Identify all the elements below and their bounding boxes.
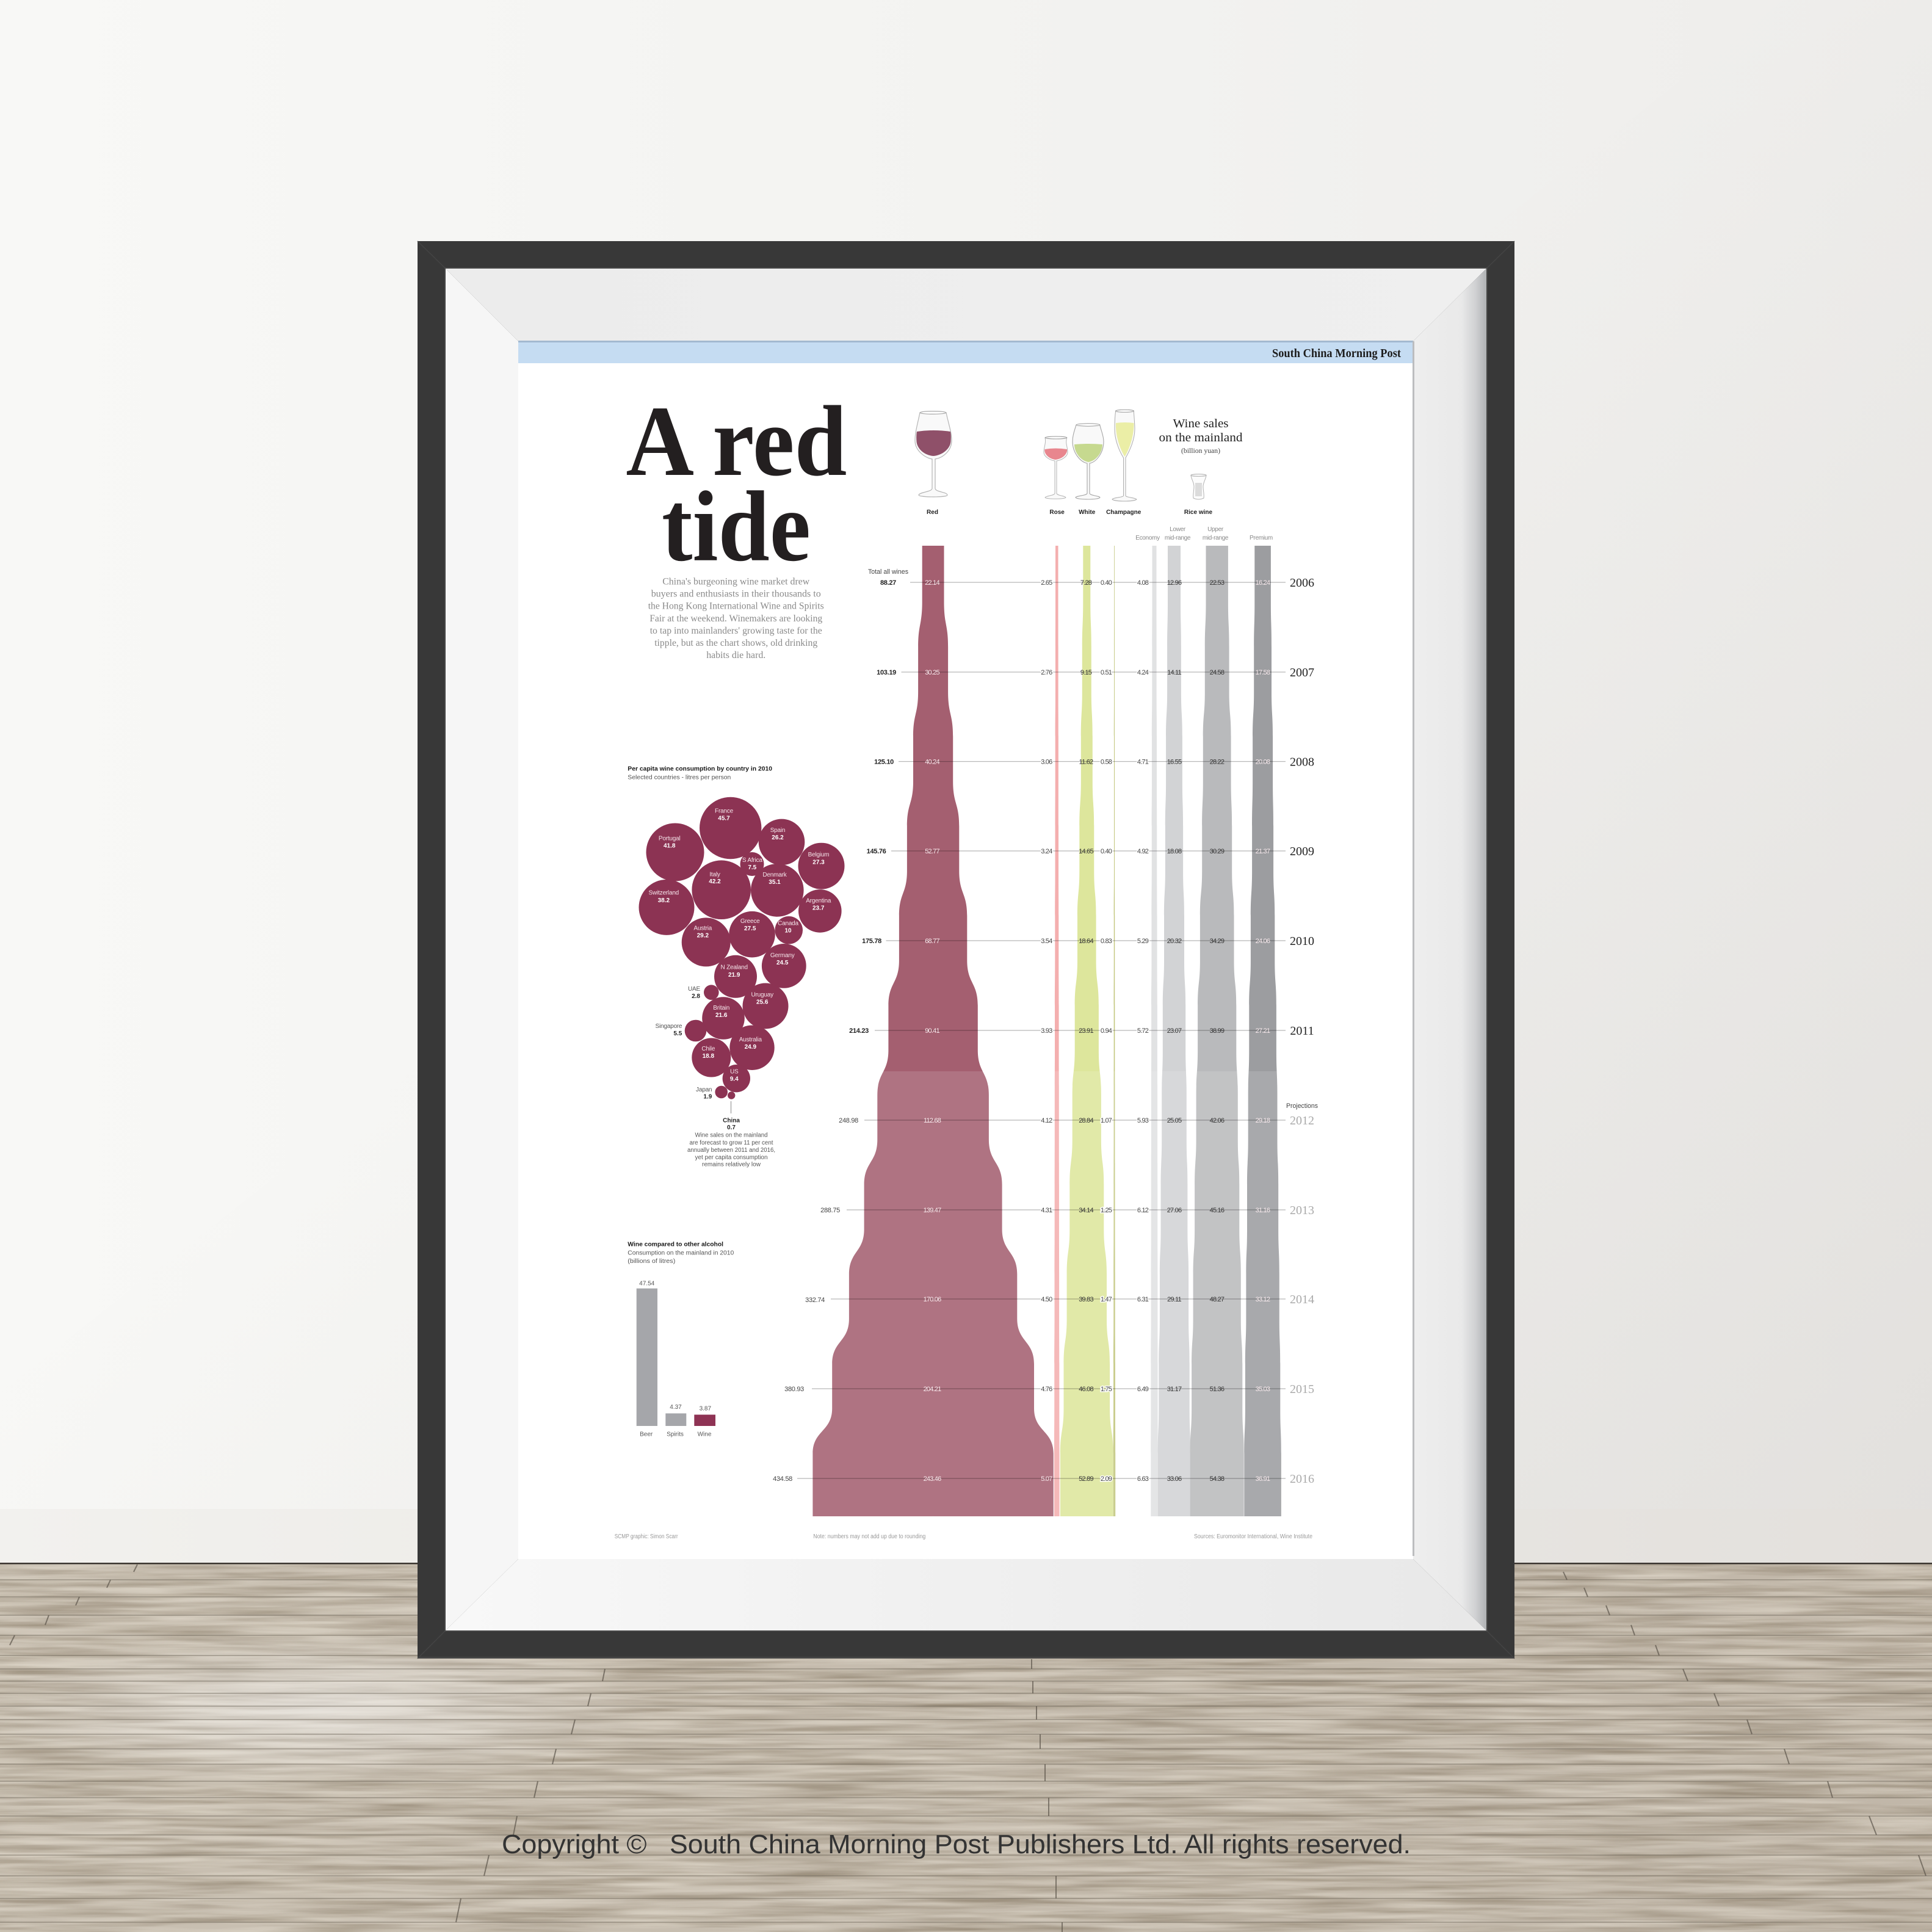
bubble: Denmark: 35.1 [769,879,781,886]
row 2015: 2015 [1290,1383,1314,1396]
heading: alcohol comparison: (billions of litres) [628,1258,675,1265]
row 2012: 28.84 [1079,1117,1093,1124]
row 2016: 243.46 [924,1475,941,1483]
title: A red [626,385,847,497]
intro text: the Hong Kong International Wine and Spirits [648,601,824,612]
chart heading: wine sales on the mainland [1159,417,1243,455]
row 2011: 5.72 [1137,1027,1149,1035]
bubble: Uruguay: 25.6 [756,999,769,1006]
bubble: Argentina: 23.7 [812,905,825,912]
bubble: Australia: 24.9 [745,1044,756,1051]
column: premium [1244,546,1281,1516]
icon: rice wine cup [1191,474,1206,499]
row 2006: 2006 [1290,576,1314,590]
bubble: Argentina: Argentina [806,898,831,905]
row 2006: 7.28 [1080,579,1092,587]
bubble: Spain: 26.2 [772,834,784,841]
row 2012: 42.06 [1210,1117,1225,1124]
bubble: France: France [715,808,734,814]
row 2011: 90.41 [925,1027,939,1035]
bubble: UAE [688,985,719,1000]
bubble: Singapore: Singapore [656,1023,682,1030]
bubble: Switzerland [639,880,695,935]
row 2010: 5.29 [1137,938,1149,945]
icon: white wine glass [1073,424,1104,499]
bubble: Austria: Austria [693,925,712,932]
row 2013: 1.25 [1101,1207,1112,1214]
bubble: Belgium: Belgium [808,852,829,858]
row 2009: 21.37 [1256,848,1270,855]
row 2011: 214.23 [849,1027,869,1035]
row 2015: 204.21 [924,1386,941,1393]
row 2015: 31.17 [1167,1386,1182,1393]
row 2010: 175.78 [862,938,881,945]
bubble: Germany: Germany [770,952,795,959]
row 2010: 0.83 [1101,938,1112,945]
row 2014: 1.47 [1101,1296,1112,1303]
bubble: Uruguay [742,983,789,1029]
poster sheet [518,341,1413,1559]
bubble: Greece [729,911,775,957]
bubble: Canada: 10 [784,927,792,934]
row 2009: 18.08 [1167,848,1182,855]
row 2007: 103.19 [877,669,896,676]
bar: beer: 47.54 [639,1281,655,1287]
row 2015: 6.49 [1137,1386,1149,1393]
price segment column labels: mid-range [1203,535,1229,541]
row 2009: 2009 [1290,845,1314,858]
row 2008: 28.22 [1210,758,1225,765]
intro text: habits die hard. [706,650,765,660]
callout: China note: are forecast to grow 11 per cent [690,1140,773,1146]
bar: wine: Wine [698,1431,712,1438]
panel: wine compared to other alcohol [628,1241,734,1438]
bar: wine: 3.87 [700,1405,711,1412]
row 2016: 5.07 [1041,1475,1052,1483]
bubble: Denmark: Denmark [762,872,787,878]
row 2010: 2010 [1290,935,1314,948]
bubble: Australia: Australia [739,1037,762,1043]
row 2011: 27.21 [1256,1027,1270,1035]
row 2013: 31.16 [1256,1207,1270,1214]
row 2008: 2008 [1290,756,1314,769]
masthead band: South China Morning Post [1272,347,1401,360]
row 2011: 0.94 [1101,1027,1112,1035]
row 2007: 9.15 [1080,669,1092,676]
bubble chart: grape cluster [639,797,845,1131]
glass labels [927,509,1212,516]
bubble: Switzerland: Switzerland [649,889,679,896]
price segment column labels: Premium [1250,535,1273,541]
heading: per capita: Selected countries - litres per person [628,774,731,781]
bubble: Britain: Britain [713,1005,729,1011]
row 2011 [849,1024,1314,1038]
callout: China note: annually between 2011 and 2016, [687,1147,775,1154]
bubble: Canada: Canada [778,921,799,927]
bubble: N Zealand: N Zealand [721,964,748,971]
bubble: Italy [692,860,751,919]
row 2006: 0.40 [1101,579,1112,587]
row 2012: 4.12 [1041,1117,1052,1124]
sources: Sources: Euromonitor International, Wine Institute [1194,1533,1312,1540]
row 2009: 14.65 [1079,848,1093,855]
bubble: Argentina [798,889,842,933]
row 2009 [867,845,1314,858]
row 2011: 23.07 [1167,1027,1182,1035]
row 2014: 29.11 [1167,1296,1182,1303]
bubble: Portugal: 41.8 [664,842,676,850]
chart heading: wine sales on the mainland: Wine sales [1173,417,1229,430]
intro text: Fair at the weekend. Winemakers are looking [649,613,822,624]
heading: alcohol comparison: Consumption on the mainland in 2010 [628,1250,734,1256]
row 2013: 4.31 [1041,1207,1052,1214]
chart heading: wine sales on the mainland: (billion yuan) [1181,447,1220,455]
intro text: buyers and enthusiasts in their thousands to [651,588,821,599]
bubble: Belgium [798,843,845,889]
bubble: Singapore: 5.5 [673,1030,682,1037]
callout: China note [687,1132,775,1168]
row 2006: 4.08 [1137,579,1149,587]
row 2015: 46.08 [1079,1386,1093,1393]
intro text: tipple, but as the chart shows, old drinking [654,638,817,648]
heading: alcohol comparison: Wine compared to other alcohol [628,1241,723,1248]
bar: beer: Beer [640,1431,653,1438]
icon: champagne flute [1112,410,1137,501]
bubble: Japan: Japan [696,1087,712,1093]
wooden floor [0,1563,1932,1932]
note: Note: numbers may not add up due to rounding [813,1533,925,1540]
row 2016: 52.89 [1079,1475,1093,1483]
row 2013: 288.75 [820,1207,840,1214]
bubble: Chile: 18.8 [703,1053,714,1060]
bubble: Canada [775,916,803,944]
chart: wine sales stream columns [806,546,1288,1516]
bubble: Austria [682,917,731,966]
price segment column labels: Lower [1170,526,1186,533]
glass labels: Rice wine [1184,509,1212,516]
total all wines heading: Total all wines [868,568,908,576]
column: champagne [1113,546,1115,1516]
row 2010: 24.06 [1256,938,1270,945]
column: economy [1151,546,1158,1516]
row 2012: 248.98 [839,1117,858,1124]
bubble: Greece: 27.5 [744,925,756,932]
bubble: China [723,1091,740,1131]
row 2016: 54.38 [1210,1475,1225,1483]
heading: per capita [628,765,772,781]
credit: SCMP graphic: Simon Scarr [615,1533,678,1540]
row 2006: 12.96 [1167,579,1182,587]
bubble: Portugal: Portugal [659,835,681,842]
heading: per capita: Per capita wine consumption by country in 2010 [628,765,772,773]
row 2011: 3.93 [1041,1027,1052,1035]
row 2009: 145.76 [867,848,886,855]
row 2008: 40.24 [925,758,939,765]
row 2007: 4.24 [1137,669,1149,676]
bubble: Britain: 21.6 [715,1012,728,1019]
panel: per capita consumption [628,765,845,1168]
row 2008 [874,756,1314,769]
row 2012: 1.07 [1101,1117,1112,1124]
bubble: Switzerland: 38.2 [658,897,670,904]
row 2015: 1.75 [1101,1386,1112,1393]
row 2007: 24.58 [1210,669,1225,676]
row 2012: 2012 [1290,1114,1314,1127]
copyright line: Copyright © South China Morning Post Publishers Ltd. All rights reserved. [502,1829,1411,1859]
icon: rose wine glass [1044,436,1068,499]
title [626,385,847,582]
icon: red wine glass [915,411,952,497]
row 2010: 20.32 [1167,938,1182,945]
bar: beer [637,1281,657,1438]
row 2016: 434.58 [773,1475,792,1483]
row 2008: 125.10 [874,758,894,765]
heading: alcohol comparison [628,1241,734,1265]
bubble: China: 0.7 [727,1124,736,1131]
bubble: Greece: Greece [740,918,760,925]
bubble: China: China [723,1117,740,1124]
bubble: Austria: 29.2 [697,933,709,939]
bubble: Uruguay: Uruguay [751,991,773,999]
row 2014: 48.27 [1210,1296,1225,1303]
row 2011: 23.91 [1079,1027,1093,1035]
glass labels: White [1079,509,1096,516]
row 2012: 29.18 [1256,1117,1270,1124]
row 2008: 11.62 [1079,758,1093,765]
bubble: Portugal [646,823,704,881]
intro text: to tap into mainlanders' growing taste for the [650,626,822,636]
bar: spirits: Spirits [667,1431,684,1438]
row 2010: 34.29 [1210,938,1225,945]
row 2013: 34.14 [1079,1207,1093,1214]
row 2006: 16.24 [1256,579,1270,587]
row 2015: 35.03 [1256,1386,1270,1393]
row 2013 [820,1204,1314,1217]
bubble: Britain [702,997,745,1040]
price segment column labels: Upper [1207,526,1224,533]
bubble: Germany [762,944,806,988]
bubble: Japan [696,1086,728,1100]
bubble: S Africa [740,852,764,876]
bubble: Spain [759,819,805,865]
row 2014: 2014 [1290,1293,1314,1306]
title: tide [662,471,811,582]
row 2013: 45.16 [1210,1207,1225,1214]
picture frame [418,241,1514,1659]
bubble: Italy: Italy [709,872,720,878]
bubble: Germany: 24.5 [776,960,789,966]
masthead band [518,341,1414,1556]
bubble: UAE: UAE [688,986,701,993]
bubble: Australia [729,1026,775,1070]
projection tint [806,1071,1288,1516]
bubble: UAE: 2.8 [692,993,700,1000]
bubble: US: US [730,1068,739,1076]
mount board [446,269,1486,1630]
row 2008: 3.06 [1041,758,1052,765]
row 2007: 30.25 [925,669,939,676]
row 2007: 2007 [1290,666,1314,679]
row 2014 [805,1293,1314,1306]
row 2008: 16.55 [1167,758,1182,765]
bubble: Belgium: 27.3 [812,859,825,866]
bubble: Japan: 1.9 [703,1094,712,1100]
glass labels: Rose [1049,509,1065,516]
price segment column labels: Economy [1135,535,1160,541]
row 2011: 2011 [1290,1024,1314,1038]
row 2013: 27.06 [1167,1207,1182,1214]
row 2013: 6.12 [1137,1207,1149,1214]
bubble: S Africa: S Africa [742,857,762,864]
row 2013: 139.47 [924,1207,941,1214]
row 2014: 170.06 [924,1296,941,1303]
bubble: US [723,1065,750,1092]
column: lower mid-range [1158,546,1190,1516]
row 2012: 25.05 [1167,1117,1182,1124]
row 2008: 0.58 [1101,758,1112,765]
bubble: N Zealand [714,955,757,998]
bar: wine [694,1405,715,1438]
row 2007: 14.11 [1167,669,1182,676]
row 2006: 22.53 [1210,579,1225,587]
price segment column labels: mid-range [1165,535,1191,541]
row 2016: 2.09 [1101,1475,1112,1483]
row 2016: 36.91 [1256,1475,1270,1483]
row 2009: 52.77 [925,848,939,855]
row 2008: 20.08 [1256,758,1270,765]
callout: China note: yet per capita consumption [695,1154,768,1161]
bubble: Spain: Spain [770,827,785,834]
row 2007 [877,666,1314,679]
row 2007: 0.51 [1101,669,1112,676]
row 2014: 4.50 [1041,1296,1052,1303]
row 2015 [784,1383,1314,1396]
bubble: US: 9.4 [730,1076,739,1083]
row 2014: 6.31 [1137,1296,1149,1303]
bubble: S Africa: 7.5 [748,864,757,871]
row 2006: 2.65 [1041,579,1052,587]
row 2016: 6.63 [1137,1475,1149,1483]
bubble: Singapore [656,1020,706,1041]
row 2014: 39.83 [1079,1296,1093,1303]
glass labels: Champagne [1106,509,1141,516]
row 2016: 33.06 [1167,1475,1182,1483]
row 2010: 18.64 [1079,938,1093,945]
row 2009: 30.29 [1210,848,1225,855]
row 2010 [862,935,1314,948]
price segment column labels [1135,526,1273,541]
row 2009: 3.24 [1041,848,1052,855]
row 2008: 4.71 [1137,758,1149,765]
room background: wall [0,0,1932,1509]
row 2006: 22.14 [925,579,939,587]
skirting board [0,1509,1932,1564]
row 2007: 17.58 [1256,669,1270,676]
row 2009: 0.40 [1101,848,1112,855]
column: red wine [812,546,1054,1516]
row 2010: 3.54 [1041,938,1052,945]
row 2007: 2.76 [1041,669,1052,676]
row 2012: 5.93 [1137,1117,1149,1124]
row 2006 [880,576,1314,590]
chart heading: wine sales on the mainland: on the mainland [1159,431,1243,444]
glass labels: Red [927,509,938,516]
bubble: France: 45.7 [718,816,730,822]
row 2009: 4.92 [1137,848,1149,855]
row 2016: 2016 [1290,1472,1314,1486]
callout: China note: remains relatively low [702,1161,761,1168]
bubble: N Zealand: 21.9 [728,972,740,979]
bubble: Chile: Chile [701,1046,715,1052]
row 2012 [839,1114,1314,1127]
row 2010: 68.77 [925,938,939,945]
column: white wine [1060,546,1113,1516]
bubble: Denmark [751,864,804,917]
intro text: China's burgeoning wine market drew [662,576,810,587]
column: upper mid-range [1190,546,1244,1516]
callout: China note: Wine sales on the mainland [695,1132,768,1139]
intro text [648,576,824,660]
row 2015: 51.36 [1210,1386,1225,1393]
bubble: France [700,797,761,859]
row 2012: 112.68 [924,1117,941,1124]
column: rose wine [1054,546,1060,1516]
row 2015: 4.76 [1041,1386,1052,1393]
bubble: Chile [692,1038,731,1077]
row 2015: 380.93 [784,1386,804,1393]
bar: spirits [665,1404,686,1438]
row 2014: 33.12 [1256,1296,1270,1303]
row 2006: 88.27 [880,579,896,587]
bar: spirits: 4.37 [670,1404,682,1411]
row 2013: 2013 [1290,1204,1314,1217]
projections label: Projections [1286,1102,1318,1110]
bubble: Italy: 42.2 [709,878,721,885]
row 2014: 332.74 [805,1297,825,1304]
row 2016 [773,1472,1314,1486]
row 2011: 38.99 [1210,1027,1225,1035]
